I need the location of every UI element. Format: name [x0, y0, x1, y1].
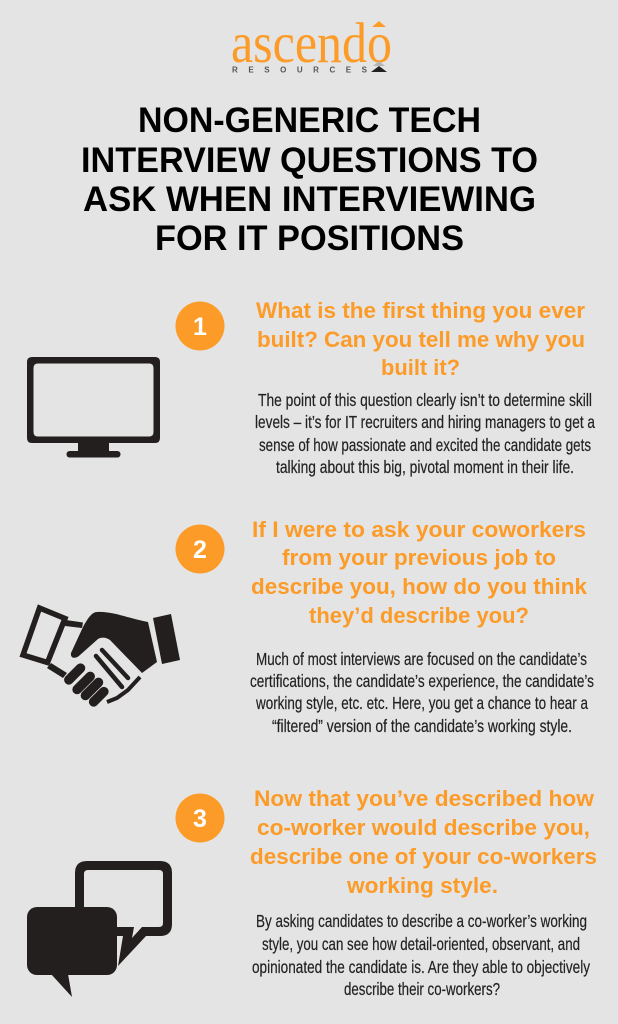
logo: ascendo resources: RESOURCES: [232, 66, 368, 74]
question 2 heading: describe you, how do you think: [251, 574, 588, 599]
question 2 body text: [250, 649, 594, 736]
question 3 heading: Now that you’ve described how: [254, 786, 595, 811]
title: NON-GENERIC TECH: [138, 101, 481, 140]
panel: question 1: [27, 298, 595, 477]
number badge 2: [176, 524, 224, 574]
number badge 1: 1: [193, 313, 207, 341]
question 3 heading: working style.: [346, 873, 498, 898]
title: FOR IT POSITIONS: [155, 219, 464, 258]
question 2 heading: If I were to ask your coworkers: [252, 517, 586, 542]
question 2 heading: [251, 517, 588, 628]
title: ASK WHEN INTERVIEWING: [83, 180, 536, 219]
number badge 3: 3: [193, 805, 207, 833]
question 1 body text: [255, 390, 595, 477]
question 3 body text: describe their co-workers?: [344, 979, 500, 999]
panel: question 2: [23, 517, 594, 736]
icon: handshake: [23, 608, 180, 709]
number badge 2: 2: [193, 536, 207, 564]
logo: ascendo resources: ascendo: [231, 12, 392, 75]
panel: question 3: [27, 786, 597, 999]
question 1 heading: What is the first thing you ever: [256, 298, 585, 323]
question 3 heading: co-worker would describe you,: [257, 815, 590, 840]
icon: computer monitor: [27, 357, 160, 458]
title: [81, 101, 538, 258]
icon: speech bubbles: [27, 861, 172, 997]
question 3 body text: [252, 911, 590, 999]
number badge 3: [176, 794, 224, 842]
number badge 1: [176, 302, 224, 350]
question 1 heading: built? Can you tell me why you: [257, 327, 585, 352]
title: INTERVIEW QUESTIONS TO: [81, 141, 538, 180]
question 3 heading: describe one of your co-workers: [250, 844, 597, 869]
question 2 heading: from your previous job to: [282, 545, 556, 570]
question 2 heading: they’d describe you?: [309, 603, 529, 628]
question 3 heading: [250, 786, 597, 898]
question 1 heading: [256, 298, 585, 380]
question 1 heading: built it?: [381, 355, 460, 380]
